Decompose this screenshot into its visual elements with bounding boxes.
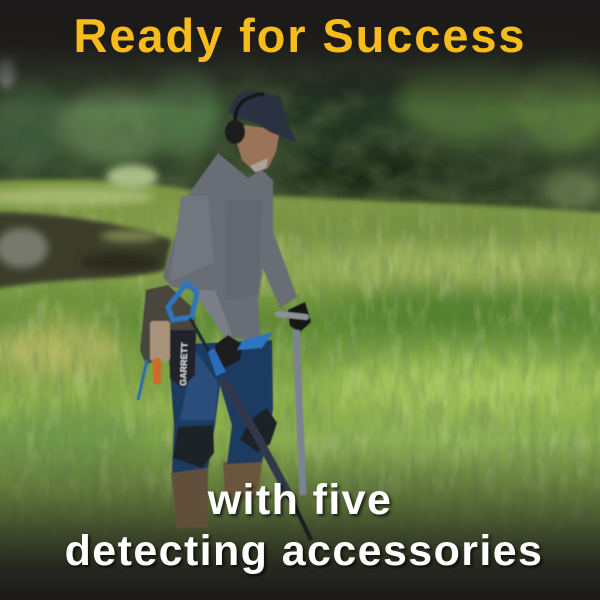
jeans [168,340,273,473]
bottom dark vignette [0,440,600,600]
pouch text: GARRETT [178,342,190,386]
knee pads [173,408,277,468]
tool belt and pouch [138,283,197,400]
boots [171,462,262,528]
background: trees [0,0,600,225]
caption: with five detecting accessories: with five [208,476,392,524]
caption: with five detecting accessories: detecting accessories [65,527,543,575]
detector: shaft, handle, control box, pole [190,314,311,540]
gloved hands [215,302,311,368]
figure: man with detector [138,90,311,540]
head with cap and headphones [225,90,297,173]
top dark vignette [0,0,600,110]
caption: with five detecting accessories [65,476,543,577]
background: meadow [0,165,600,600]
shirt [163,153,297,340]
background: pond [0,212,172,290]
title: Ready for Success: Ready for Success [74,9,526,62]
